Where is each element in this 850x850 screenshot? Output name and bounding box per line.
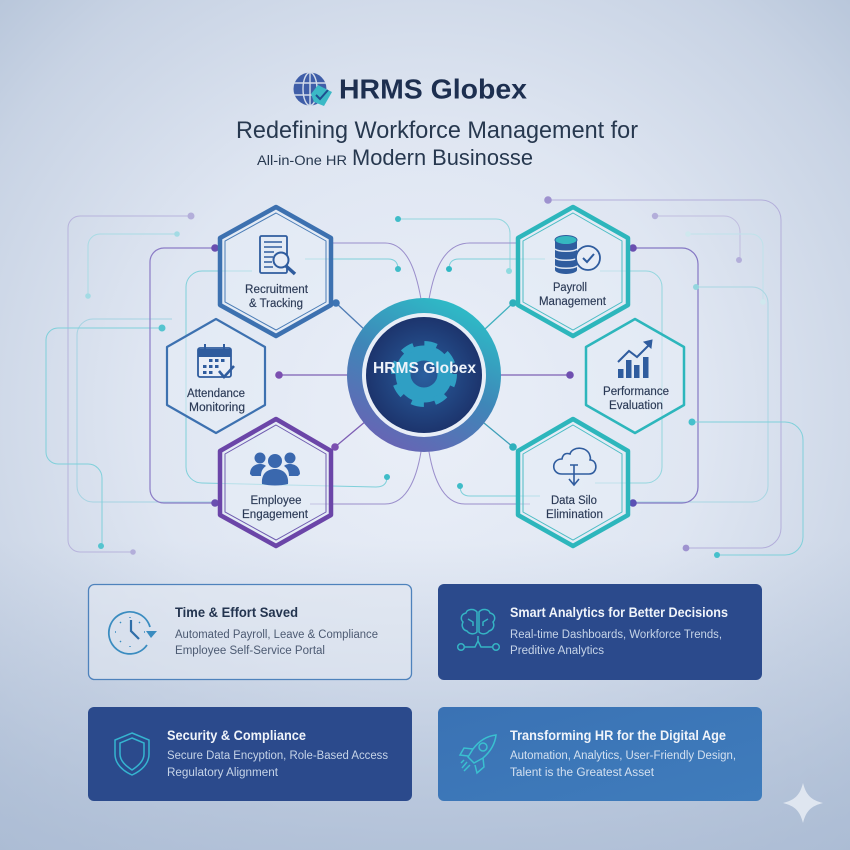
text: Smart Analytics for Better Decisions: [510, 605, 728, 620]
text: Time & Effort Saved: [175, 605, 298, 620]
label: [603, 386, 669, 412]
label: Data Silo: [551, 495, 597, 507]
icon: clock: [109, 612, 157, 654]
text: Real-time Dashboards, Workforce Trends,: [510, 629, 722, 641]
label: Recruitment: [245, 284, 309, 296]
icon: document with magnifier: [260, 236, 295, 274]
card: transforming hr: [438, 707, 762, 801]
hexagon: performance evaluation: [586, 319, 684, 433]
hub label: HRMS Globex: [373, 360, 476, 377]
icon: sparkle: [783, 783, 823, 823]
icon: globe with check: [294, 72, 332, 106]
label: & Tracking: [249, 298, 303, 310]
title block: [236, 72, 638, 170]
hexagon: data silo elimination: [518, 419, 628, 546]
label: Payroll: [553, 282, 587, 294]
icon: shield: [115, 733, 149, 775]
text: Secure Data Encyption, Role-Based Access: [167, 750, 388, 762]
icon: calendar with check: [198, 344, 234, 377]
text: Employee Self-Service Portal: [175, 645, 325, 657]
hexagon: employee engagement: [220, 419, 331, 546]
label: Attendance: [187, 388, 245, 400]
card: time and effort saved: [88, 584, 412, 680]
text: Talent is the Greatest Asset: [510, 767, 655, 779]
connector nodes: [85, 196, 766, 558]
label: [546, 495, 603, 521]
subtitle line 1: Redefining Workforce Management for: [236, 117, 638, 144]
text: [510, 605, 728, 657]
label: [539, 282, 607, 308]
subtitle line 2: Modern Businosse: [352, 145, 533, 170]
subtitle line 2: [257, 145, 533, 170]
label: Performance: [603, 386, 669, 398]
icon: brain network: [458, 609, 499, 650]
icon: rising bar chart: [618, 340, 652, 378]
icon: rocket: [460, 735, 496, 773]
icon: cloud download: [554, 448, 596, 485]
label: Evaluation: [609, 400, 663, 412]
label: Management: [539, 296, 607, 308]
network connector lines left: [46, 216, 422, 552]
heading: HRMS Globex: [339, 74, 527, 104]
text: [510, 728, 736, 779]
label: Monitoring: [189, 402, 245, 414]
label: Employee: [250, 495, 302, 507]
text: Security & Compliance: [167, 728, 306, 743]
hexagon: payroll management: [518, 207, 628, 336]
label: [242, 495, 309, 521]
central hub: [347, 298, 501, 452]
network connector lines right: [398, 200, 803, 555]
text: Preditive Analytics: [510, 645, 604, 657]
card: security and compliance: [88, 707, 412, 801]
icon: database with clock: [555, 236, 600, 274]
icon: gear: [395, 345, 453, 403]
label: [187, 388, 245, 414]
text: Regulatory Alignment: [167, 767, 279, 779]
text: Automated Payroll, Leave & Compliance: [175, 629, 378, 641]
icon: people group: [250, 452, 300, 486]
label: Engagement: [242, 509, 309, 521]
hexagon: attendance monitoring: [167, 319, 265, 433]
text: [167, 728, 388, 779]
text: Transforming HR for the Digital Age: [510, 728, 726, 743]
hub spokes: [279, 303, 570, 447]
card: smart analytics: [438, 584, 762, 680]
subtitle line 2: All-in-One HR: [257, 153, 347, 168]
text: Automation, Analytics, User-Friendly Design,: [510, 750, 736, 762]
hexagon: recruitment and tracking: [220, 207, 331, 336]
label: Elimination: [546, 509, 603, 521]
label: [245, 284, 309, 310]
text: [175, 605, 378, 657]
